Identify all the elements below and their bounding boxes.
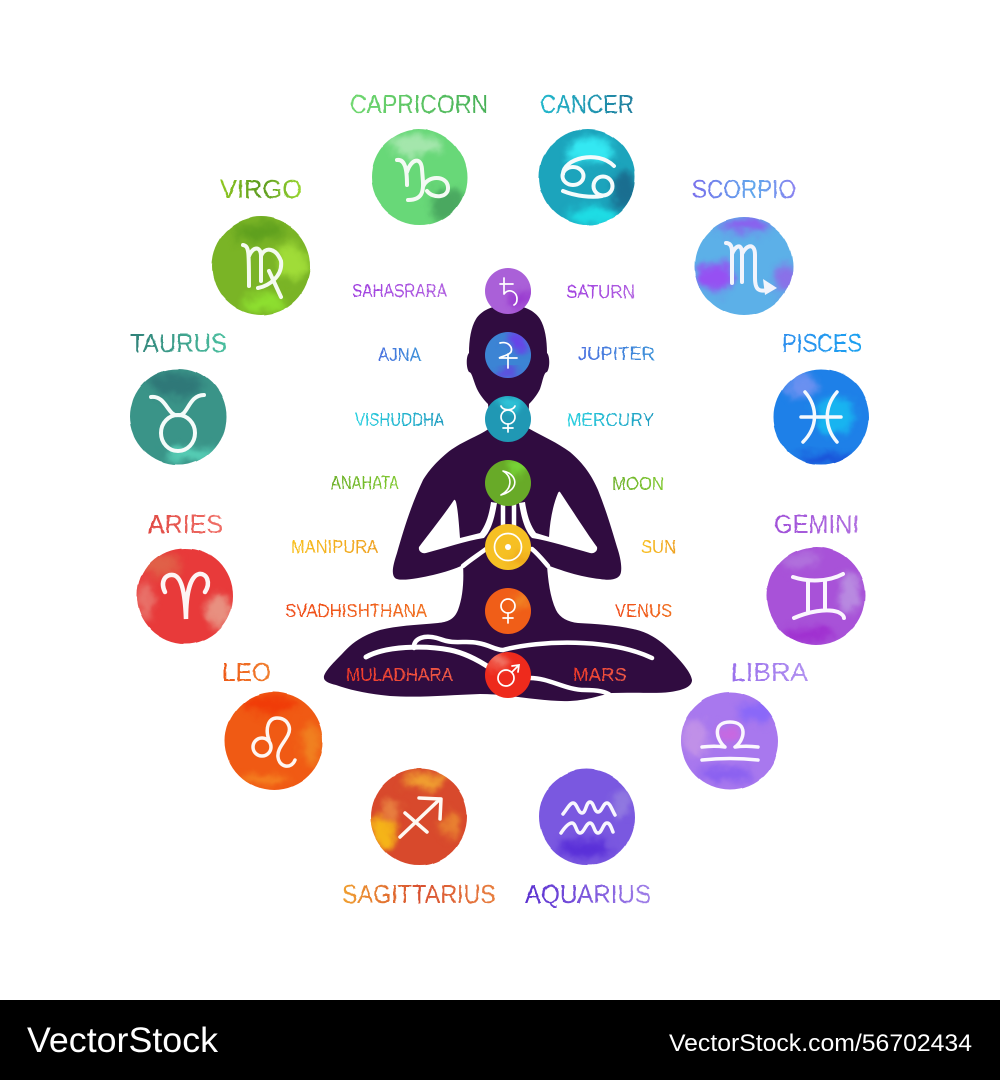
- Cancer label: CANCER: [540, 89, 634, 119]
- arm gap right: [519, 492, 597, 553]
- Venus symbol: [501, 599, 515, 623]
- zodiac: Cancer: [538, 94, 635, 226]
- chakra: Vishuddha / Mercury: [355, 395, 654, 443]
- Virgo label: VIRGO: [220, 174, 302, 204]
- Mars label: MARS: [573, 665, 627, 685]
- Sun label: SUN: [641, 537, 676, 557]
- Aquarius symbol: [561, 802, 615, 833]
- Leo label: LEO: [222, 657, 271, 687]
- Gemini label: GEMINI: [774, 509, 859, 539]
- meditating figure silhouette: [324, 305, 692, 701]
- chakra: Sahasrara / Saturn: [352, 267, 635, 315]
- Pisces symbol: [801, 392, 841, 442]
- Aries label: ARIES: [148, 509, 223, 539]
- Aquarius label: AQUARIUS: [525, 879, 651, 909]
- Libra symbol: [702, 722, 758, 760]
- zodiac: Capricorn: [350, 89, 488, 230]
- Taurus symbol: [151, 395, 204, 451]
- Gemini symbol: [793, 574, 844, 618]
- Venus label: VENUS: [615, 601, 672, 621]
- arm gap left: [419, 500, 497, 553]
- Pisces label: PISCES: [782, 328, 862, 358]
- Leo symbol: [253, 718, 295, 766]
- Ajna label: AJNA: [378, 345, 421, 365]
- zodiac: Pisces: [774, 334, 869, 464]
- Scorpio symbol: [726, 243, 777, 295]
- Vishuddha label: VISHUDDHA: [355, 410, 444, 430]
- Mercury symbol: [501, 406, 515, 432]
- chakra: Ajna / Jupiter: [378, 331, 655, 379]
- footer brand: VectorStock: [27, 1021, 219, 1060]
- zodiac: Aries: [136, 514, 233, 644]
- Muladhara label: MULADHARA: [346, 665, 453, 685]
- chakra: Manipura / Sun: [291, 523, 676, 571]
- finger and body lines: [366, 505, 652, 695]
- footer image id: VectorStock.com/56702434: [669, 1030, 972, 1057]
- zodiac: Gemini: [766, 514, 866, 645]
- Saturn symbol: [500, 278, 517, 305]
- zodiac: Scorpio: [692, 180, 796, 315]
- Libra label: LIBRA: [731, 657, 809, 687]
- Moon symbol: [501, 471, 515, 495]
- Taurus label: TAURUS: [130, 328, 227, 358]
- zodiac: Taurus: [130, 333, 226, 465]
- zodiac: Sagittarius: [342, 764, 496, 909]
- zodiac: Virgo: [212, 179, 310, 316]
- Mercury label: MERCURY: [567, 410, 654, 430]
- Moon label: MOON: [612, 474, 664, 494]
- zodiac: Libra: [681, 662, 808, 790]
- chakra: Anahata / Moon: [331, 459, 664, 507]
- footer bar: [0, 1000, 1000, 1080]
- zodiac: Leo: [224, 662, 322, 790]
- Mars symbol: [498, 665, 519, 686]
- Svadhishthana label: SVADHISHTHANA: [285, 601, 427, 621]
- Virgo symbol: [243, 245, 281, 297]
- Jupiter label: JUPITER: [578, 344, 655, 364]
- zodiac: Aquarius: [525, 764, 651, 909]
- Scorpio label: SCORPIO: [692, 174, 796, 204]
- Capricorn label: CAPRICORN: [350, 89, 488, 119]
- Cancer symbol: [562, 157, 614, 197]
- Sahasrara label: SAHASRARA: [352, 281, 447, 301]
- Anahata label: ANAHATA: [331, 473, 399, 493]
- Sun symbol: [494, 534, 522, 560]
- Manipura label: MANIPURA: [291, 537, 378, 557]
- chakra: Svadhishthana / Venus: [285, 587, 672, 635]
- Sagittarius label: SAGITTARIUS: [342, 879, 496, 909]
- Jupiter symbol: [499, 343, 517, 368]
- Capricorn symbol: [397, 160, 448, 200]
- chakra: Muladhara / Mars: [346, 651, 627, 699]
- Sagittarius symbol: [400, 798, 441, 837]
- Saturn label: SATURN: [566, 282, 635, 302]
- Aries symbol: [163, 574, 208, 619]
